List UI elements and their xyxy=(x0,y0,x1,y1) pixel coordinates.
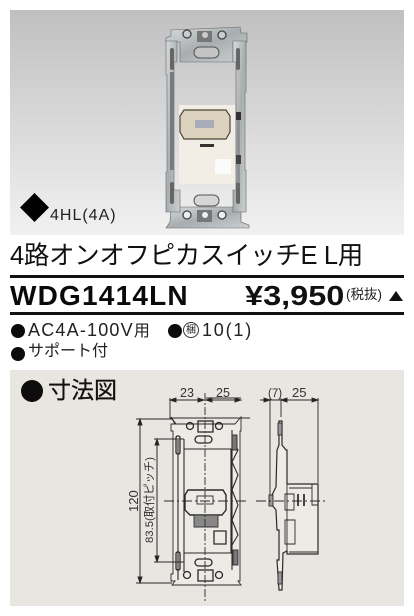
spec: packing xyxy=(168,320,253,340)
rule top xyxy=(10,275,404,278)
spec: packing: 10(1) xyxy=(202,320,253,340)
dimension: width labels: 25 xyxy=(216,386,230,400)
spec: support: サポート付 xyxy=(28,343,108,360)
dimension: height 120: 120 xyxy=(126,490,141,512)
dimension: mounting pitch: 83.5(取付ピッチ) xyxy=(143,457,156,543)
side view xyxy=(256,398,325,590)
icon: switch photo xyxy=(166,26,250,228)
dimension: depth labels: 25 xyxy=(292,385,306,400)
panel: product photo xyxy=(10,10,404,235)
icon: triangle xyxy=(389,291,403,301)
tax note: (税抜) xyxy=(346,287,382,302)
spec: voltage: AC4A-100V用 xyxy=(28,320,150,340)
dimension: depth labels xyxy=(260,385,318,402)
dimension: height 120 xyxy=(126,419,172,583)
dimension: depth labels: (7) xyxy=(268,388,282,400)
dimension: width labels xyxy=(170,386,241,402)
dimension: mounting pitch xyxy=(143,439,184,562)
rating label: 4HL(4A) xyxy=(50,207,117,224)
heading: dimensions: 寸法図 xyxy=(48,377,117,403)
model number: WDG1414LN xyxy=(10,280,189,311)
panel: dimensions xyxy=(10,370,404,606)
front view xyxy=(164,393,250,602)
price: ¥3,950 xyxy=(245,280,344,311)
icon: diamond xyxy=(20,193,49,222)
drawing: dimensioned views xyxy=(126,385,325,601)
dimension: width labels: 23 xyxy=(180,386,194,400)
spec: packing: 梱 xyxy=(186,325,196,336)
title: 4路オンオフピカスイッチE L用 xyxy=(10,242,363,270)
rule bottom xyxy=(10,312,404,315)
